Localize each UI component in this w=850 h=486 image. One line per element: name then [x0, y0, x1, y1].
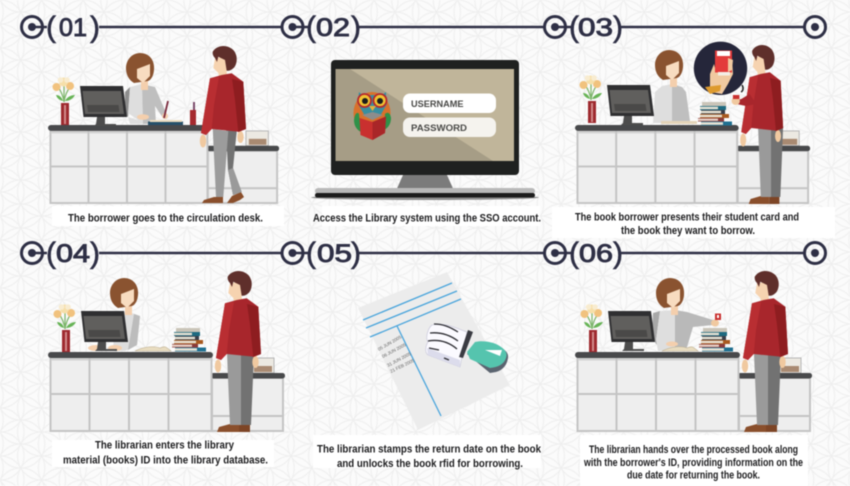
timeline row 1: 03: [578, 14, 613, 42]
timeline row 2: 06: [579, 240, 613, 268]
stamp: [426, 324, 508, 373]
caption 6: due date for returning the book.: [627, 470, 760, 482]
panel 4: entering ID: [48, 271, 285, 432]
date slip: 31 JUN 2005: [386, 351, 412, 368]
caption 5: The librarian stamps the return date on the book: [317, 444, 542, 456]
timeline row 2: ): [351, 237, 361, 270]
librarian writing: [125, 53, 183, 125]
caption 4: [52, 440, 274, 467]
caption 6: with the borrower's ID, providing information on the: [583, 457, 803, 469]
borrower walking: [200, 46, 246, 203]
date slip: [358, 272, 510, 430]
timeline row 1: (: [306, 11, 316, 44]
date slip: 05 JUN 2005: [377, 334, 403, 352]
timeline row 2: 04: [56, 240, 90, 268]
panel 1: borrower at desk: [48, 46, 279, 203]
caption 2: [313, 206, 541, 226]
timeline row 1: 01: [59, 14, 87, 42]
caption 2: Access the Library system using the SSO account.: [313, 212, 541, 224]
caption 3: The book borrower presents their student card and: [575, 212, 799, 224]
librarian: [653, 50, 697, 124]
caption 6: The librarian hands over the processed book along: [589, 444, 798, 456]
timeline row 2: ): [90, 237, 100, 270]
timeline row 1: ): [351, 11, 361, 44]
timeline row 2: ): [613, 237, 623, 270]
caption 6: [580, 435, 808, 486]
timeline row 2: 05: [317, 240, 352, 268]
password field: PASSWORD: [411, 123, 467, 134]
pen holder: [190, 102, 196, 125]
caption 4: material (books) ID into the library database.: [63, 454, 268, 466]
student card inset: [694, 42, 747, 95]
timeline row 1: [22, 11, 826, 44]
password field: [403, 118, 496, 137]
owl logo: [354, 92, 391, 140]
date slip: 06 JUN 2005: [381, 342, 407, 359]
caption 5: and unlocks the book rfid for borrowing.: [337, 458, 523, 470]
borrower with card: [732, 45, 783, 204]
open book: [135, 347, 171, 351]
caption 1: [52, 206, 284, 226]
timeline row 1: ): [90, 11, 100, 44]
timeline row 2: [22, 237, 826, 270]
username field: USERNAME: [411, 99, 464, 110]
panel 6: handing over book: [575, 271, 812, 432]
timeline row 2: (: [46, 237, 56, 270]
timeline row 1: 02: [316, 14, 350, 42]
caption 5: [313, 435, 542, 470]
date slip: 21 FEB 2005: [389, 358, 415, 374]
timeline row 1: ): [613, 11, 623, 44]
librarian handing card: [652, 278, 721, 351]
librarian typing: [88, 278, 140, 351]
panel 5: stamping return date: [358, 272, 510, 430]
borrower: [742, 271, 788, 432]
caption 4: The librarian enters the library: [95, 440, 234, 452]
panel 2: computer login: [311, 60, 539, 200]
caption 3: [552, 207, 835, 238]
open book: [662, 347, 698, 351]
borrower: [215, 271, 261, 432]
timeline row 1: (: [46, 11, 56, 44]
panel 3: presenting student card: [575, 42, 810, 204]
caption 1: The borrower goes to the circulation desk.: [68, 212, 263, 224]
timeline row 2: (: [306, 237, 316, 270]
timeline row 1: (: [569, 11, 579, 44]
username field: [403, 94, 496, 113]
timeline row 2: (: [569, 237, 579, 270]
caption 3: the book they want to borrow.: [621, 225, 755, 237]
